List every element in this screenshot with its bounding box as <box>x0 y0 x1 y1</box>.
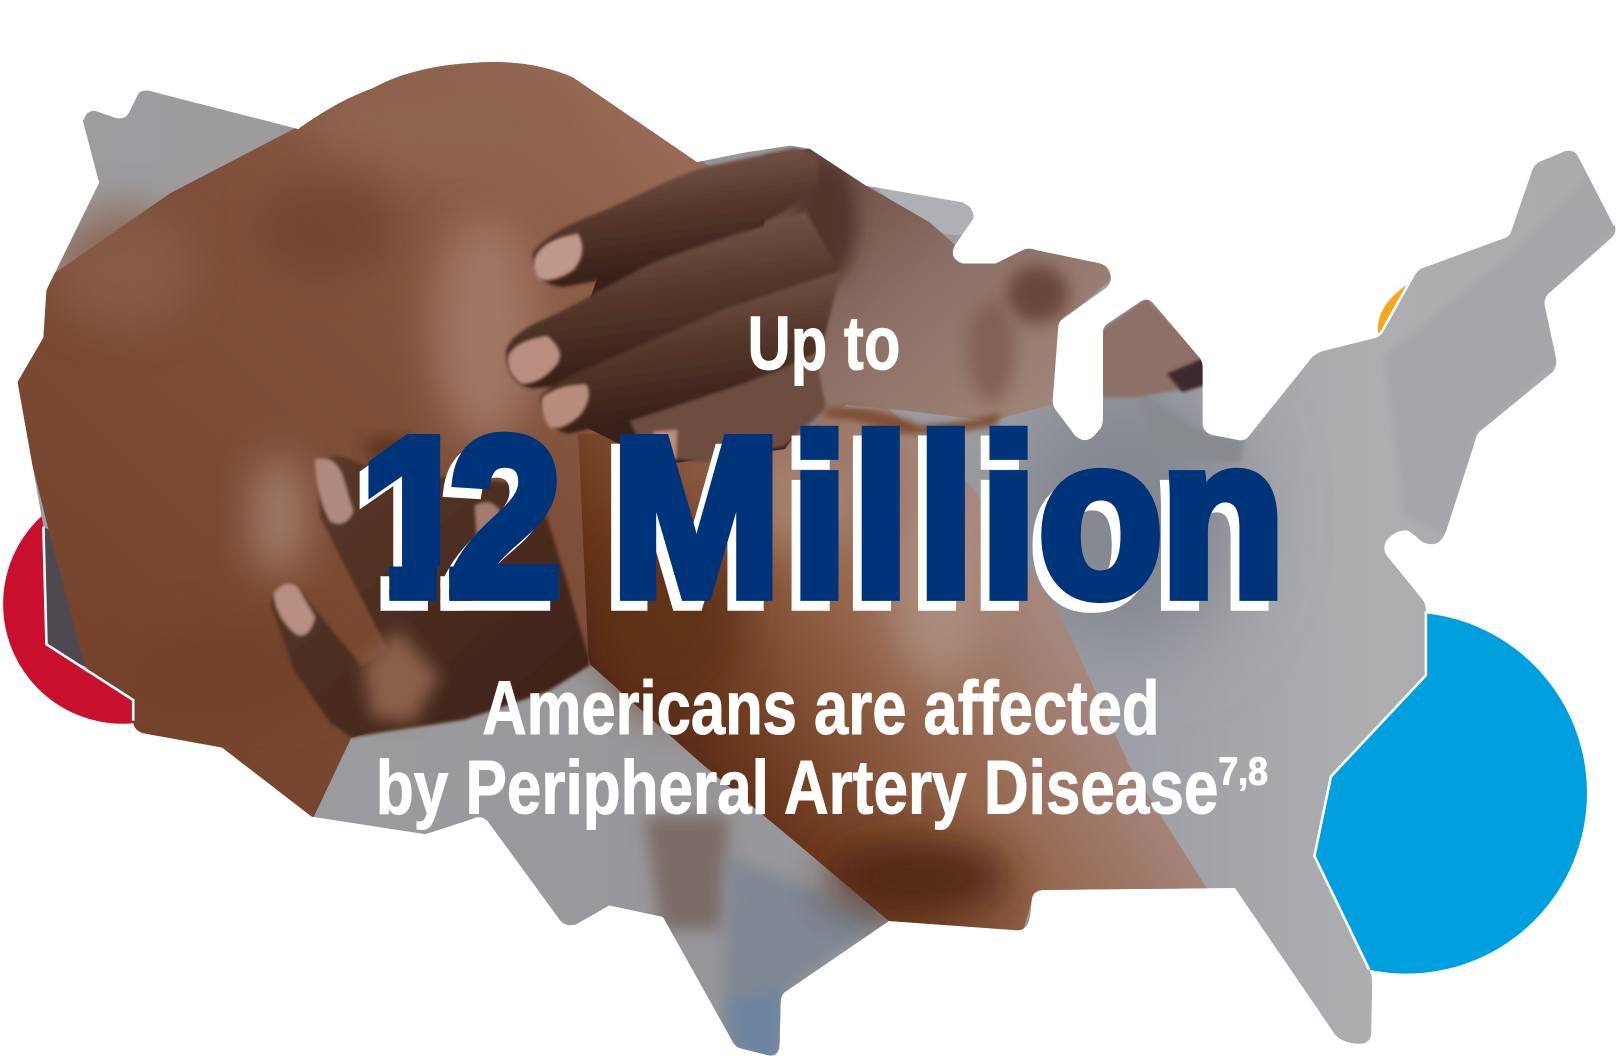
wrist piece <box>1101 297 1208 398</box>
superscript citation: 7,8 <box>1218 750 1268 794</box>
white offset shadow: 12 Million <box>351 400 1276 653</box>
fingernails <box>508 233 677 459</box>
red circle behind map <box>3 484 243 724</box>
lower leg <box>566 408 1213 934</box>
big number: 12 Million <box>360 426 1278 613</box>
upper leg shading <box>52 72 578 723</box>
fingers <box>506 148 842 463</box>
subheading line 1: Americans are affected <box>482 666 1160 751</box>
yellow circle sliver behind map <box>1378 285 1406 335</box>
dark strip at left edge <box>41 527 87 667</box>
upper hand <box>506 148 1208 465</box>
upper leg and knee <box>18 62 710 817</box>
subheading line 2 with citation: by Peripheral Artery Disease <box>376 746 1218 831</box>
dark underlay between fingers <box>587 220 792 463</box>
lower-left hand fingers <box>271 456 591 737</box>
headline: Up to: Up to <box>748 302 900 387</box>
navy figure: 12 Million <box>360 390 1285 644</box>
bed sheet shading <box>645 176 1615 1061</box>
lower leg shading <box>599 444 1012 915</box>
blue circle behind map <box>1226 612 1587 974</box>
